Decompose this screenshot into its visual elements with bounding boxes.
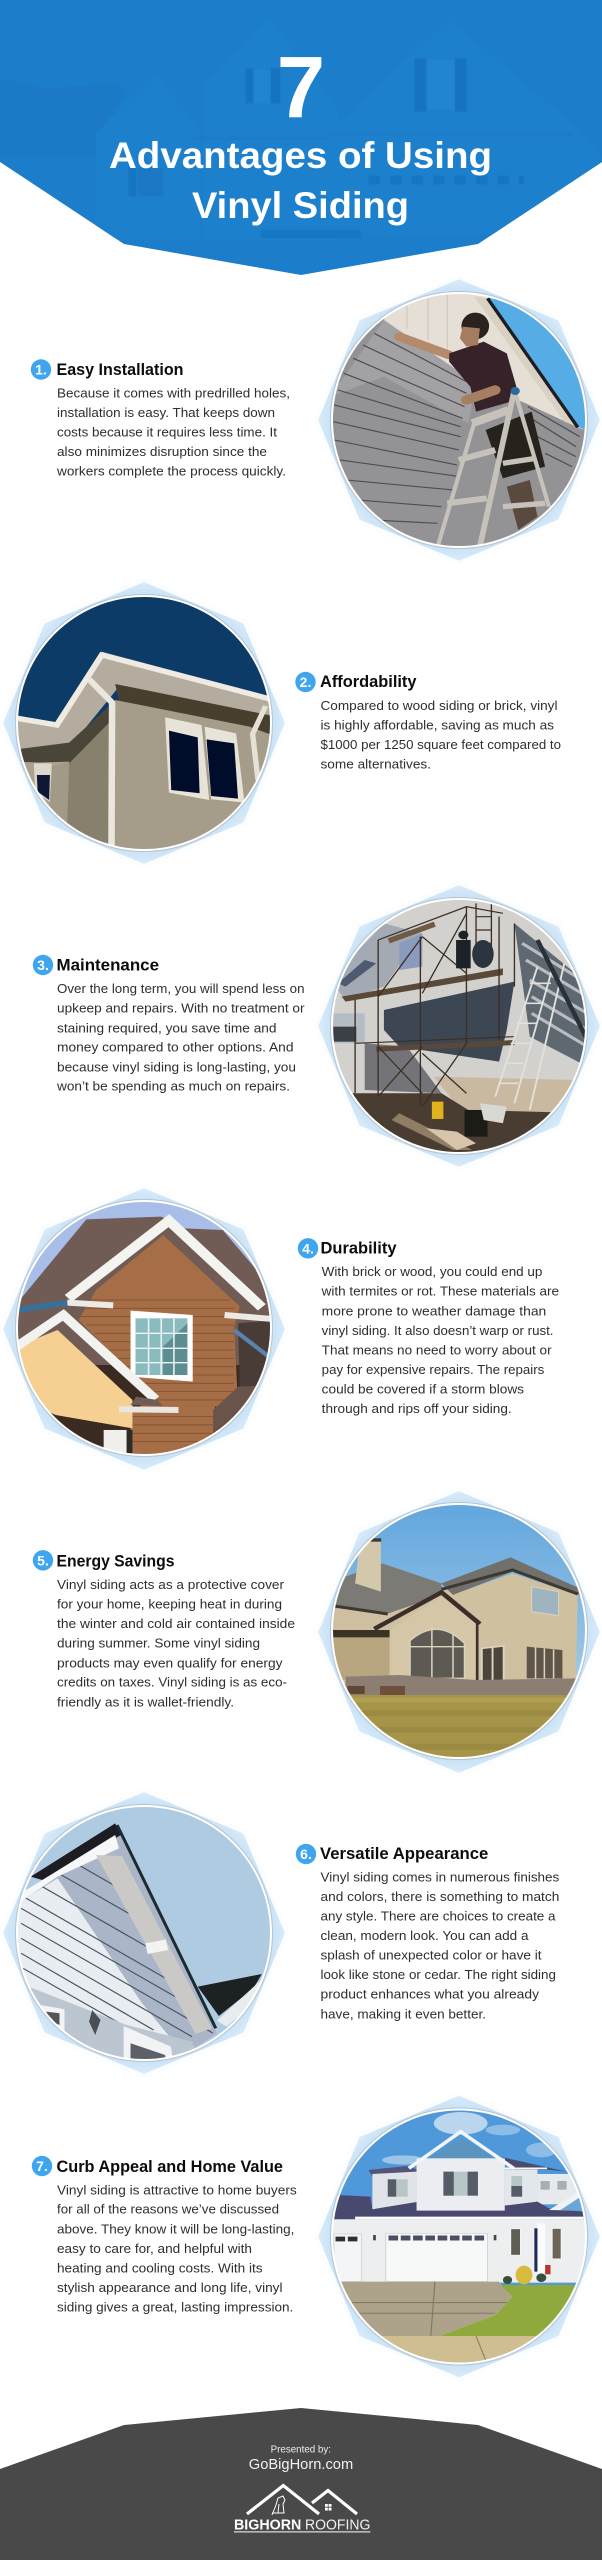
- text block 1: workers complete the process quickly.: [56, 464, 286, 479]
- heading: versatile appearance: Versatile Appearance: [320, 1845, 488, 1863]
- panel: 5 energy savings: [33, 1489, 602, 1782]
- number badge 2: [295, 672, 316, 692]
- heading: easy installation: Easy Installation: [56, 361, 184, 379]
- text block 6: Vinyl siding comes in numerous finishes: [320, 1869, 560, 1884]
- text block 7: above. They know it will be long-lasting,: [57, 2221, 294, 2236]
- header banner: [0, 0, 602, 275]
- panel: 4 durability: [0, 1180, 559, 1480]
- heading: curb appeal and home value: Curb Appeal and Home Value: [56, 2158, 283, 2176]
- number badge 1: [31, 359, 51, 380]
- text block 5: for your home, keeping heat in during: [57, 1596, 282, 1611]
- text block 7: easy to care for, and helpful with: [57, 2241, 252, 2256]
- number badge 5: 5.: [37, 1552, 49, 1568]
- text block 6: and colors, there is something to match: [320, 1889, 559, 1904]
- logo: bighorn roofing: [234, 2486, 370, 2533]
- icon: roofs: [247, 2486, 357, 2514]
- text block 2: is highly affordable, saving as much as: [320, 718, 555, 733]
- text block 4: through and rips off your siding.: [322, 1401, 512, 1416]
- photo: beige house corner against dark blue sky: [0, 580, 292, 880]
- text block 3: upkeep and repairs. With no treatment or: [57, 1001, 305, 1016]
- heading: energy savings: Energy Savings: [56, 1553, 174, 1571]
- text block 6: [320, 1869, 560, 2021]
- heading: maintenance: Maintenance: [56, 957, 159, 975]
- text block 6: splash of unexpected color or have it: [320, 1948, 542, 1963]
- text block 3: money compared to other options. And: [57, 1040, 294, 1055]
- text block 7: siding gives a great, lasting impression.: [57, 2300, 293, 2315]
- text block 1: also minimizes disruption since the: [57, 444, 267, 459]
- text block 4: [321, 1264, 559, 1416]
- text block 7: Vinyl siding is attractive to home buyers: [57, 2182, 297, 2197]
- panel: 2 affordability: [0, 580, 561, 880]
- panel: 6 versatile appearance: [0, 1780, 560, 2080]
- text block 5: friendly as it is wallet-friendly.: [57, 1694, 234, 1709]
- text block 1: installation is easy. That keeps down: [57, 405, 275, 420]
- photo: white siding gable with black tile roof: [0, 1780, 292, 2080]
- text block 3: [56, 981, 305, 1094]
- text block 5: [57, 1577, 295, 1709]
- presented by label: Presented by:: [271, 2443, 331, 2455]
- text block 1: [56, 385, 290, 479]
- text block 4: could be covered if a storm blows: [322, 1382, 525, 1397]
- text block 4: with termites or rot. These materials are: [321, 1284, 559, 1299]
- text block 5: during summer. Some vinyl siding: [57, 1636, 260, 1651]
- icon: dog: [272, 2496, 285, 2515]
- wordmark: ROOFING: [305, 2517, 370, 2533]
- text block 5: the winter and cold air contained inside: [57, 1616, 295, 1631]
- text block 4: pay for expensive repairs. The repairs: [322, 1362, 545, 1377]
- text block 4: With brick or wood, you could end up: [322, 1264, 542, 1279]
- text block 2: some alternatives.: [320, 757, 431, 772]
- text block 1: costs because it requires less time. It: [57, 425, 277, 440]
- text block 5: credits on taxes. Vinyl siding is as eco-: [57, 1675, 287, 1690]
- photo: brown siding gable with white trim: [0, 1180, 292, 1480]
- photo: beige house with lawn: [316, 1489, 602, 1782]
- number badge 1: 1.: [35, 362, 47, 378]
- number badge 3: 3.: [37, 957, 49, 973]
- text block 6: have, making it even better.: [320, 2006, 486, 2021]
- text block 3: staining required, you save time and: [57, 1020, 276, 1035]
- heading: affordability: Affordability: [320, 673, 417, 691]
- ghost house background: [96, 58, 602, 240]
- number badge 3: [33, 955, 53, 975]
- text block 3: Over the long term, you will spend less on: [57, 981, 304, 996]
- heading: durability: Durability: [320, 1240, 397, 1258]
- photo: white house with garage and driveway: [316, 2094, 602, 2380]
- wordmark: [234, 2517, 370, 2533]
- text block 2: [320, 698, 561, 772]
- text block 4: vinyl siding. It also doesn’t warp or rust.: [322, 1323, 554, 1338]
- big number 7: 7: [277, 39, 325, 136]
- text block 4: more prone to weather damage than: [322, 1303, 546, 1318]
- number badge 6: [296, 1844, 316, 1864]
- number badge 2: 2.: [300, 674, 311, 690]
- photo: scaffolding against house: [316, 880, 602, 1180]
- panel: 1 easy installation: [31, 277, 602, 563]
- number badge 5: [33, 1550, 53, 1571]
- title line 2: Vinyl Siding: [192, 185, 409, 226]
- number badge 4: 4.: [302, 1240, 314, 1256]
- website: GoBigHorn.com: [249, 2456, 353, 2473]
- panel: 3 maintenance: [33, 880, 602, 1180]
- title line 1: Advantages of Using: [109, 135, 492, 176]
- number badge 7: 7.: [36, 2158, 48, 2174]
- text block 5: products may even qualify for energy: [57, 1655, 283, 1670]
- text block 6: product enhances what you already: [320, 1987, 540, 2002]
- text block 6: clean, modern look. You can add a: [320, 1928, 529, 1943]
- text block 5: Vinyl siding acts as a protective cover: [57, 1577, 285, 1592]
- text block 2: $1000 per 1250 square feet compared to: [320, 737, 561, 752]
- text block 4: That means no need to worry about or: [322, 1342, 552, 1357]
- text block 3: because vinyl siding is long-lasting, you: [57, 1059, 296, 1074]
- number badge 7: [32, 2156, 52, 2176]
- text block 6: any style. There are choices to create a: [320, 1909, 556, 1924]
- panel: 7 curb appeal and home value: [32, 2094, 602, 2380]
- wordmark: BIGHORN: [234, 2517, 301, 2533]
- text block 3: won’t be spending as much on repairs.: [56, 1079, 290, 1094]
- footer banner: [0, 2408, 602, 2560]
- text block 7: heating and cooling costs. With its: [57, 2261, 263, 2276]
- photo: worker on ladder installing siding: [316, 277, 602, 563]
- text block 6: look like stone or cedar. The right siding: [320, 1967, 556, 1982]
- text block 1: Because it comes with predrilled holes,: [57, 385, 290, 400]
- number badge 6: 6.: [300, 1846, 312, 1862]
- text block 2: Compared to wood siding or brick, vinyl: [320, 698, 558, 713]
- text block 7: [57, 2182, 297, 2315]
- text block 7: stylish appearance and long life, vinyl: [57, 2280, 283, 2295]
- number badge 4: [298, 1238, 318, 1259]
- text block 7: for all of the reasons we’ve discussed: [57, 2202, 279, 2217]
